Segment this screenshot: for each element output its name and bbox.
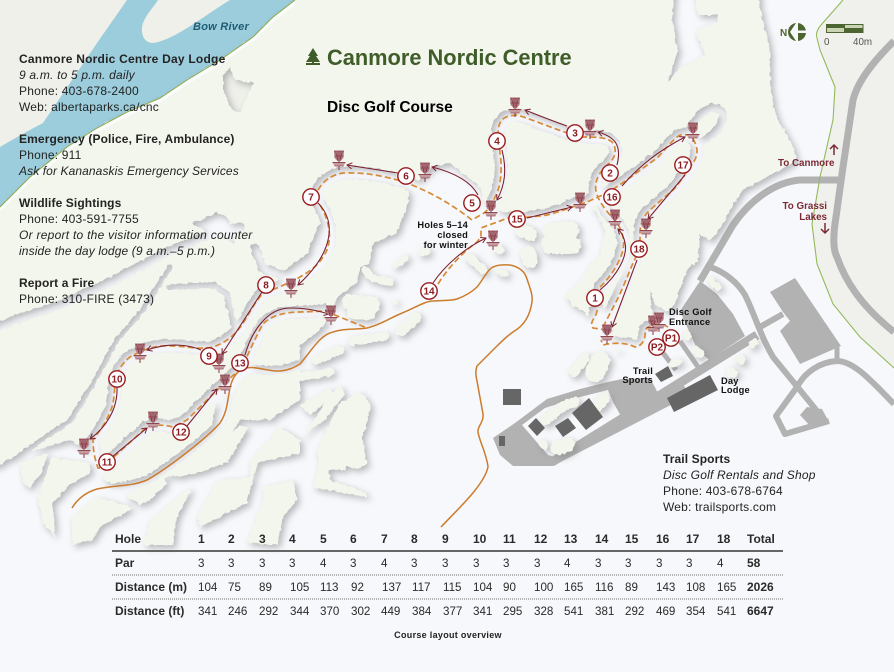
table header row: 16 xyxy=(656,532,670,546)
info: trail sports: Trail Sports xyxy=(663,452,730,466)
table row: distance m: 113 xyxy=(320,581,338,594)
info: report a fire: Report a Fire xyxy=(19,276,95,290)
table row: par: 3 xyxy=(228,557,234,570)
hole number markers: 10 xyxy=(111,375,123,386)
table row: distance m: 89 xyxy=(259,581,272,594)
table header row: 9 xyxy=(442,532,449,546)
hole number markers: 4 xyxy=(494,137,500,148)
table row: distance ft: 246 xyxy=(228,605,247,618)
tee baskets xyxy=(78,98,700,458)
table row: par: Par xyxy=(115,556,135,570)
table row: par: 3 xyxy=(656,557,662,570)
table header row: 11 xyxy=(503,532,516,546)
table row: par: 3 xyxy=(411,557,417,570)
table row: distance m: 89 xyxy=(625,581,638,594)
table row: distance ft: 354 xyxy=(686,605,706,618)
table row: distance ft: 6647 xyxy=(747,604,774,618)
table header row: Hole xyxy=(115,532,141,546)
table header row: 6 xyxy=(350,532,357,546)
info: wildlife sightings: Phone: 403-591-7755 xyxy=(19,212,139,226)
label: holes closed: for winter xyxy=(424,240,468,250)
table row: par: 4 xyxy=(381,557,388,570)
hole number markers: 11 xyxy=(102,458,113,469)
table header row: 18 xyxy=(717,532,731,546)
table row: distance ft: 341 xyxy=(473,605,492,618)
subtitle: Disc Golf Course xyxy=(327,99,453,116)
info: wildlife sightings: Wildlife Sightings xyxy=(19,196,122,210)
hole number markers: 12 xyxy=(175,428,187,439)
scale bar: 40m xyxy=(853,37,872,48)
info: day lodge: Phone: 403-678-2400 xyxy=(19,84,139,98)
label: disc golf entrance: Entrance xyxy=(669,317,710,327)
table row: par: 58 xyxy=(747,556,761,570)
hole number markers: 5 xyxy=(469,199,475,210)
table row: distance ft: 295 xyxy=(503,605,522,618)
buildings xyxy=(499,366,718,446)
hole number markers: 13 xyxy=(234,359,246,370)
table row: distance m: 108 xyxy=(686,581,705,594)
label: to Canmore: To Canmore xyxy=(778,158,835,169)
hole number markers: 1 xyxy=(592,294,598,305)
table header row: 17 xyxy=(686,532,700,546)
table row: distance ft: 469 xyxy=(656,605,675,618)
table header row: 12 xyxy=(534,532,548,546)
hole number markers: 3 xyxy=(572,129,578,140)
label: holes closed: closed xyxy=(437,230,468,240)
river bank line xyxy=(0,0,295,210)
table row: distance m: 137 xyxy=(382,581,401,594)
table header row: 15 xyxy=(625,532,639,546)
east boundary line xyxy=(812,0,894,368)
table row: distance m: 115 xyxy=(443,581,461,594)
hole number markers: 16 xyxy=(606,193,618,204)
table row: distance m: 92 xyxy=(351,581,364,594)
table row: distance m: 105 xyxy=(290,581,309,594)
icon: north compass xyxy=(780,23,807,41)
info: day lodge: 9 a.m. to 5 p.m. daily xyxy=(19,68,136,82)
table header row: 14 xyxy=(595,532,609,546)
table row: distance m: 100 xyxy=(534,581,553,594)
arrow: up xyxy=(830,145,838,155)
table row: distance m: 104 xyxy=(198,581,218,594)
table row: par: 3 xyxy=(259,557,265,570)
table row: par: 3 xyxy=(198,557,204,570)
table row: distance ft: 302 xyxy=(351,605,370,618)
table row: distance ft: 292 xyxy=(625,605,644,618)
table row: par: 3 xyxy=(625,557,631,570)
label: holes closed: Holes 5–14 xyxy=(417,220,469,230)
hole number markers: 9 xyxy=(206,352,212,363)
table header row: 7 xyxy=(381,532,388,546)
table row: par: 4 xyxy=(717,557,724,570)
table header row: 13 xyxy=(564,532,578,546)
table row: distance ft: 344 xyxy=(290,605,310,618)
hole number markers: 6 xyxy=(403,172,409,183)
table row: distance m: 104 xyxy=(473,581,493,594)
scale bar: 0 xyxy=(824,37,830,48)
hole number markers: 2 xyxy=(607,169,613,180)
Bow River xyxy=(0,0,297,210)
hole number markers: P2 xyxy=(651,343,664,354)
table row: distance m: 165 xyxy=(717,581,736,594)
table row: distance ft: 541 xyxy=(717,605,736,618)
table: course scorecard xyxy=(112,532,784,618)
info: wildlife sightings: inside the day lodge (9 a.m.–5 p.m.) xyxy=(19,244,215,258)
hole number markers: 18 xyxy=(633,245,645,256)
info: trail sports: Web: trailsports.com xyxy=(663,500,776,514)
table row: distance ft: 541 xyxy=(564,605,583,618)
table header row: 4 xyxy=(289,532,296,546)
info: emergency: Emergency (Police, Fire, Ambulance) xyxy=(19,132,235,146)
table row: par: 3 xyxy=(442,557,448,570)
caption: Course layout overview xyxy=(394,630,503,640)
scale bar xyxy=(824,24,872,48)
northwest land xyxy=(0,0,300,215)
table row: distance ft: 328 xyxy=(534,605,553,618)
label: trail sports building: Sports xyxy=(622,375,653,385)
table header row: 10 xyxy=(473,532,487,546)
hole number markers: 15 xyxy=(511,215,523,226)
table header row: 5 xyxy=(320,532,327,546)
table row: distance m: 116 xyxy=(595,581,613,594)
paved trail xyxy=(72,265,532,527)
table row: par: 3 xyxy=(350,557,356,570)
info: emergency: Phone: 911 xyxy=(19,148,82,162)
hole number markers: 14 xyxy=(423,287,435,298)
table row: distance m: 143 xyxy=(656,581,675,594)
table row: par: 3 xyxy=(534,557,540,570)
river label: Bow River xyxy=(193,21,250,33)
table row: distance ft: 341 xyxy=(198,605,217,618)
hole number markers: 8 xyxy=(263,281,269,292)
table row: par: 4 xyxy=(564,557,571,570)
table row: par: 3 xyxy=(289,557,295,570)
hole number markers: 7 xyxy=(308,193,314,204)
table row: distance m: 2026 xyxy=(747,580,774,594)
course fairway dashes xyxy=(93,115,697,468)
info: day lodge: Canmore Nordic Centre Day Lodge xyxy=(19,52,226,66)
table header rule xyxy=(112,550,783,552)
table row: distance m: 165 xyxy=(564,581,583,594)
forest cover xyxy=(0,0,802,550)
title: Canmore Nordic Centre xyxy=(327,45,572,70)
hole number markers: P1 xyxy=(665,334,678,345)
info: trail sports: Phone: 403-678-6764 xyxy=(663,484,783,498)
row divider xyxy=(112,575,784,599)
table row: par: 3 xyxy=(503,557,509,570)
table row: par: 3 xyxy=(595,557,601,570)
table header row: 2 xyxy=(228,532,235,546)
icon: tree xyxy=(306,48,320,65)
table row: distance ft: 381 xyxy=(595,605,614,618)
table row: distance m: 117 xyxy=(412,581,430,594)
label: disc golf entrance: Disc Golf xyxy=(669,307,712,317)
table header row: Total xyxy=(747,532,775,546)
table row: distance ft: 384 xyxy=(412,605,432,618)
arrow: down xyxy=(821,223,829,233)
hole number markers xyxy=(99,125,691,470)
table row: par: 3 xyxy=(686,557,692,570)
table row: distance ft: 370 xyxy=(320,605,339,618)
roads and parking xyxy=(493,41,894,466)
table row: distance ft: 292 xyxy=(259,605,278,618)
table row: par: 3 xyxy=(473,557,479,570)
table row: distance ft: 449 xyxy=(381,605,400,618)
table header row: 8 xyxy=(411,532,418,546)
east land xyxy=(812,0,894,368)
info: wildlife sightings: Or report to the visitor information counter xyxy=(19,228,253,242)
label: day lodge building: Day xyxy=(721,376,739,386)
info: report a fire: Phone: 310-FIRE (3473) xyxy=(19,292,154,306)
info: emergency: Ask for Kananaskis Emergency Services xyxy=(18,164,239,178)
label: to Grassi Lakes: To Grassi xyxy=(783,201,827,212)
info: trail sports: Disc Golf Rentals and Shop xyxy=(663,468,816,482)
icon: north compass: N xyxy=(780,28,787,39)
table header row: 3 xyxy=(259,532,266,546)
table row: par: 4 xyxy=(320,557,327,570)
table row: distance ft: 377 xyxy=(443,605,462,618)
table row: distance m: 75 xyxy=(228,581,241,594)
label: to Grassi Lakes: Lakes xyxy=(799,212,828,223)
label: day lodge building: Lodge xyxy=(721,385,750,395)
table row: distance m: 90 xyxy=(503,581,516,594)
hole number markers: 17 xyxy=(677,161,689,172)
table row: distance ft: Distance (ft) xyxy=(115,604,184,618)
info: day lodge: Web: albertaparks.ca/cnc xyxy=(19,100,159,114)
label: trail sports building: Trail xyxy=(633,366,653,376)
table row: distance m: Distance (m) xyxy=(115,580,187,594)
table header row: 1 xyxy=(198,532,205,546)
hole arrows xyxy=(90,110,685,457)
